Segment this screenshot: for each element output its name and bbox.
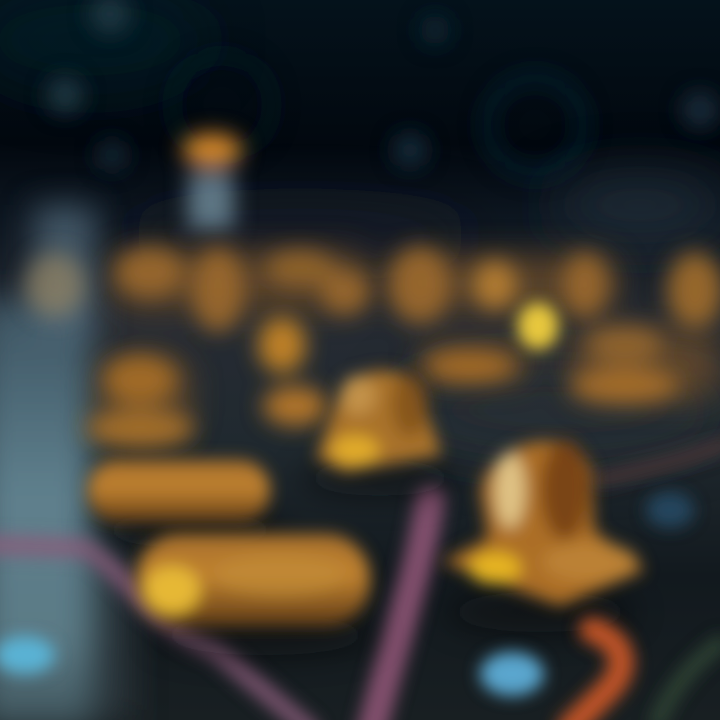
flame top capsule: [182, 133, 242, 230]
capsule 2: [136, 534, 370, 626]
glass column left: [0, 205, 132, 720]
medium gold cone: [316, 371, 442, 472]
capsule shadows: [95, 460, 635, 655]
distant capsule row: [25, 247, 720, 446]
bokeh circles: [47, 0, 718, 173]
distant capsule mass: [100, 250, 720, 440]
pink lines: [0, 445, 720, 720]
bright yellow glow: [517, 302, 559, 350]
big gold bell: [442, 440, 645, 606]
blue and orange accents: [0, 492, 720, 720]
capsule 1: [88, 460, 270, 522]
top haze: [0, 0, 720, 460]
